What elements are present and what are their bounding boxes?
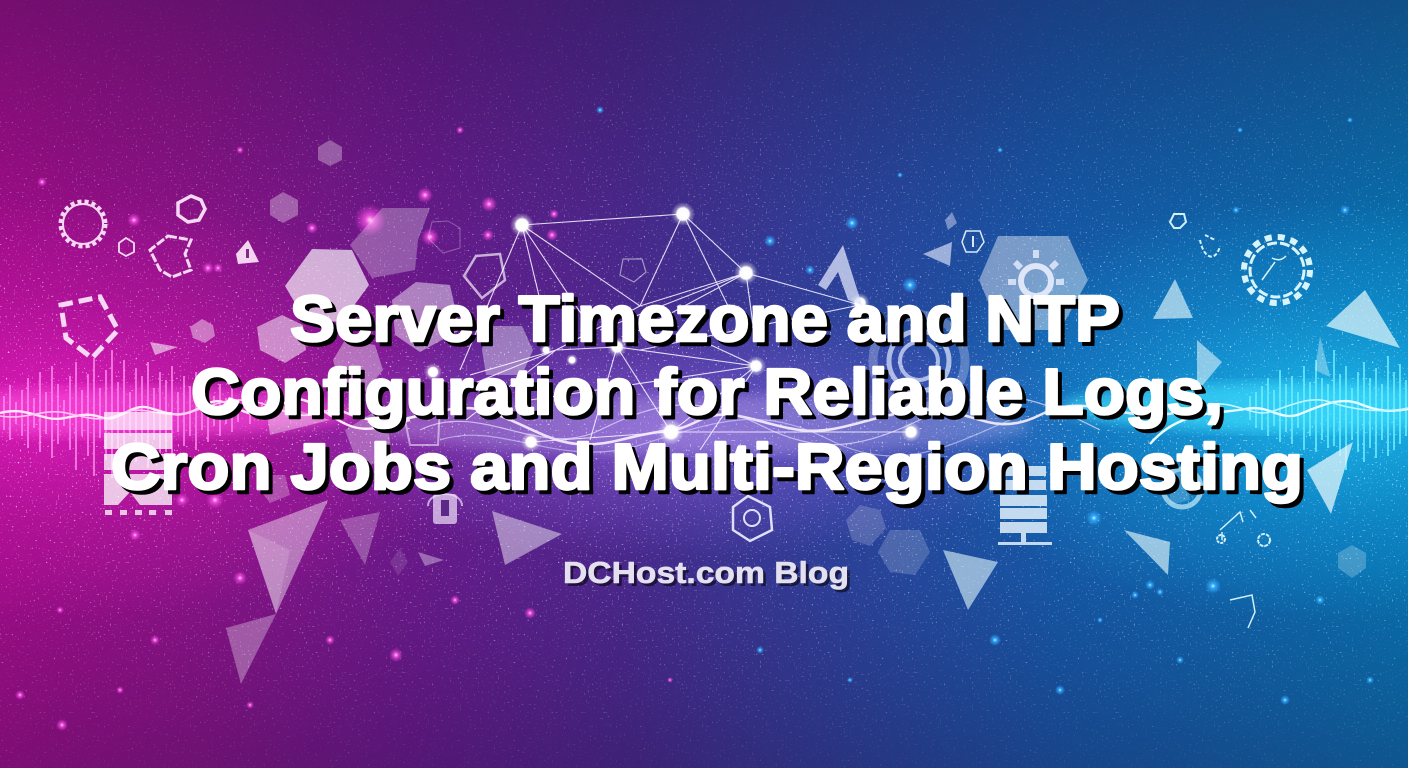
triangle icon center right xyxy=(818,212,957,305)
polygon shards left xyxy=(150,342,562,684)
subtitle: DCHost.com Blog xyxy=(566,558,852,593)
center wave xyxy=(340,395,1180,456)
icon: small hexagon ring center xyxy=(733,496,772,541)
title: Cron Jobs and Multi-Region Hosting xyxy=(111,430,1303,503)
icon: right gear xyxy=(1244,237,1310,303)
icon: small hex info xyxy=(962,231,984,252)
title: Server Timezone and NTP xyxy=(294,286,1124,359)
title: Configuration for Reliable Logs, xyxy=(191,355,1223,428)
network nodes xyxy=(424,202,921,452)
icon: left server rack xyxy=(104,412,172,515)
icon: concentric clock rings xyxy=(873,315,965,407)
network graph xyxy=(460,214,911,450)
hexagons lower center xyxy=(390,505,930,576)
icon: padlock triangle xyxy=(236,240,259,264)
title: Cron Jobs and Multi-Region Hosting xyxy=(115,434,1307,507)
title: Configuration for Reliable Logs, xyxy=(195,359,1227,432)
polygon shards right xyxy=(943,279,1400,610)
subtitle: DCHost.com Blog xyxy=(563,555,849,590)
icon: right ring xyxy=(1163,469,1201,507)
title: Server Timezone and NTP xyxy=(290,282,1120,355)
icon: right server rack xyxy=(998,466,1052,545)
title xyxy=(111,282,1307,507)
glowing particles xyxy=(15,106,1374,731)
icon: lock badge xyxy=(428,494,462,524)
right waveform xyxy=(1060,350,1408,470)
hexagon cluster left xyxy=(190,140,646,503)
left waveform xyxy=(0,350,410,478)
icon: left gear rings xyxy=(61,196,205,358)
icon: gear hexagon xyxy=(979,236,1088,330)
small right icons xyxy=(1170,214,1270,628)
